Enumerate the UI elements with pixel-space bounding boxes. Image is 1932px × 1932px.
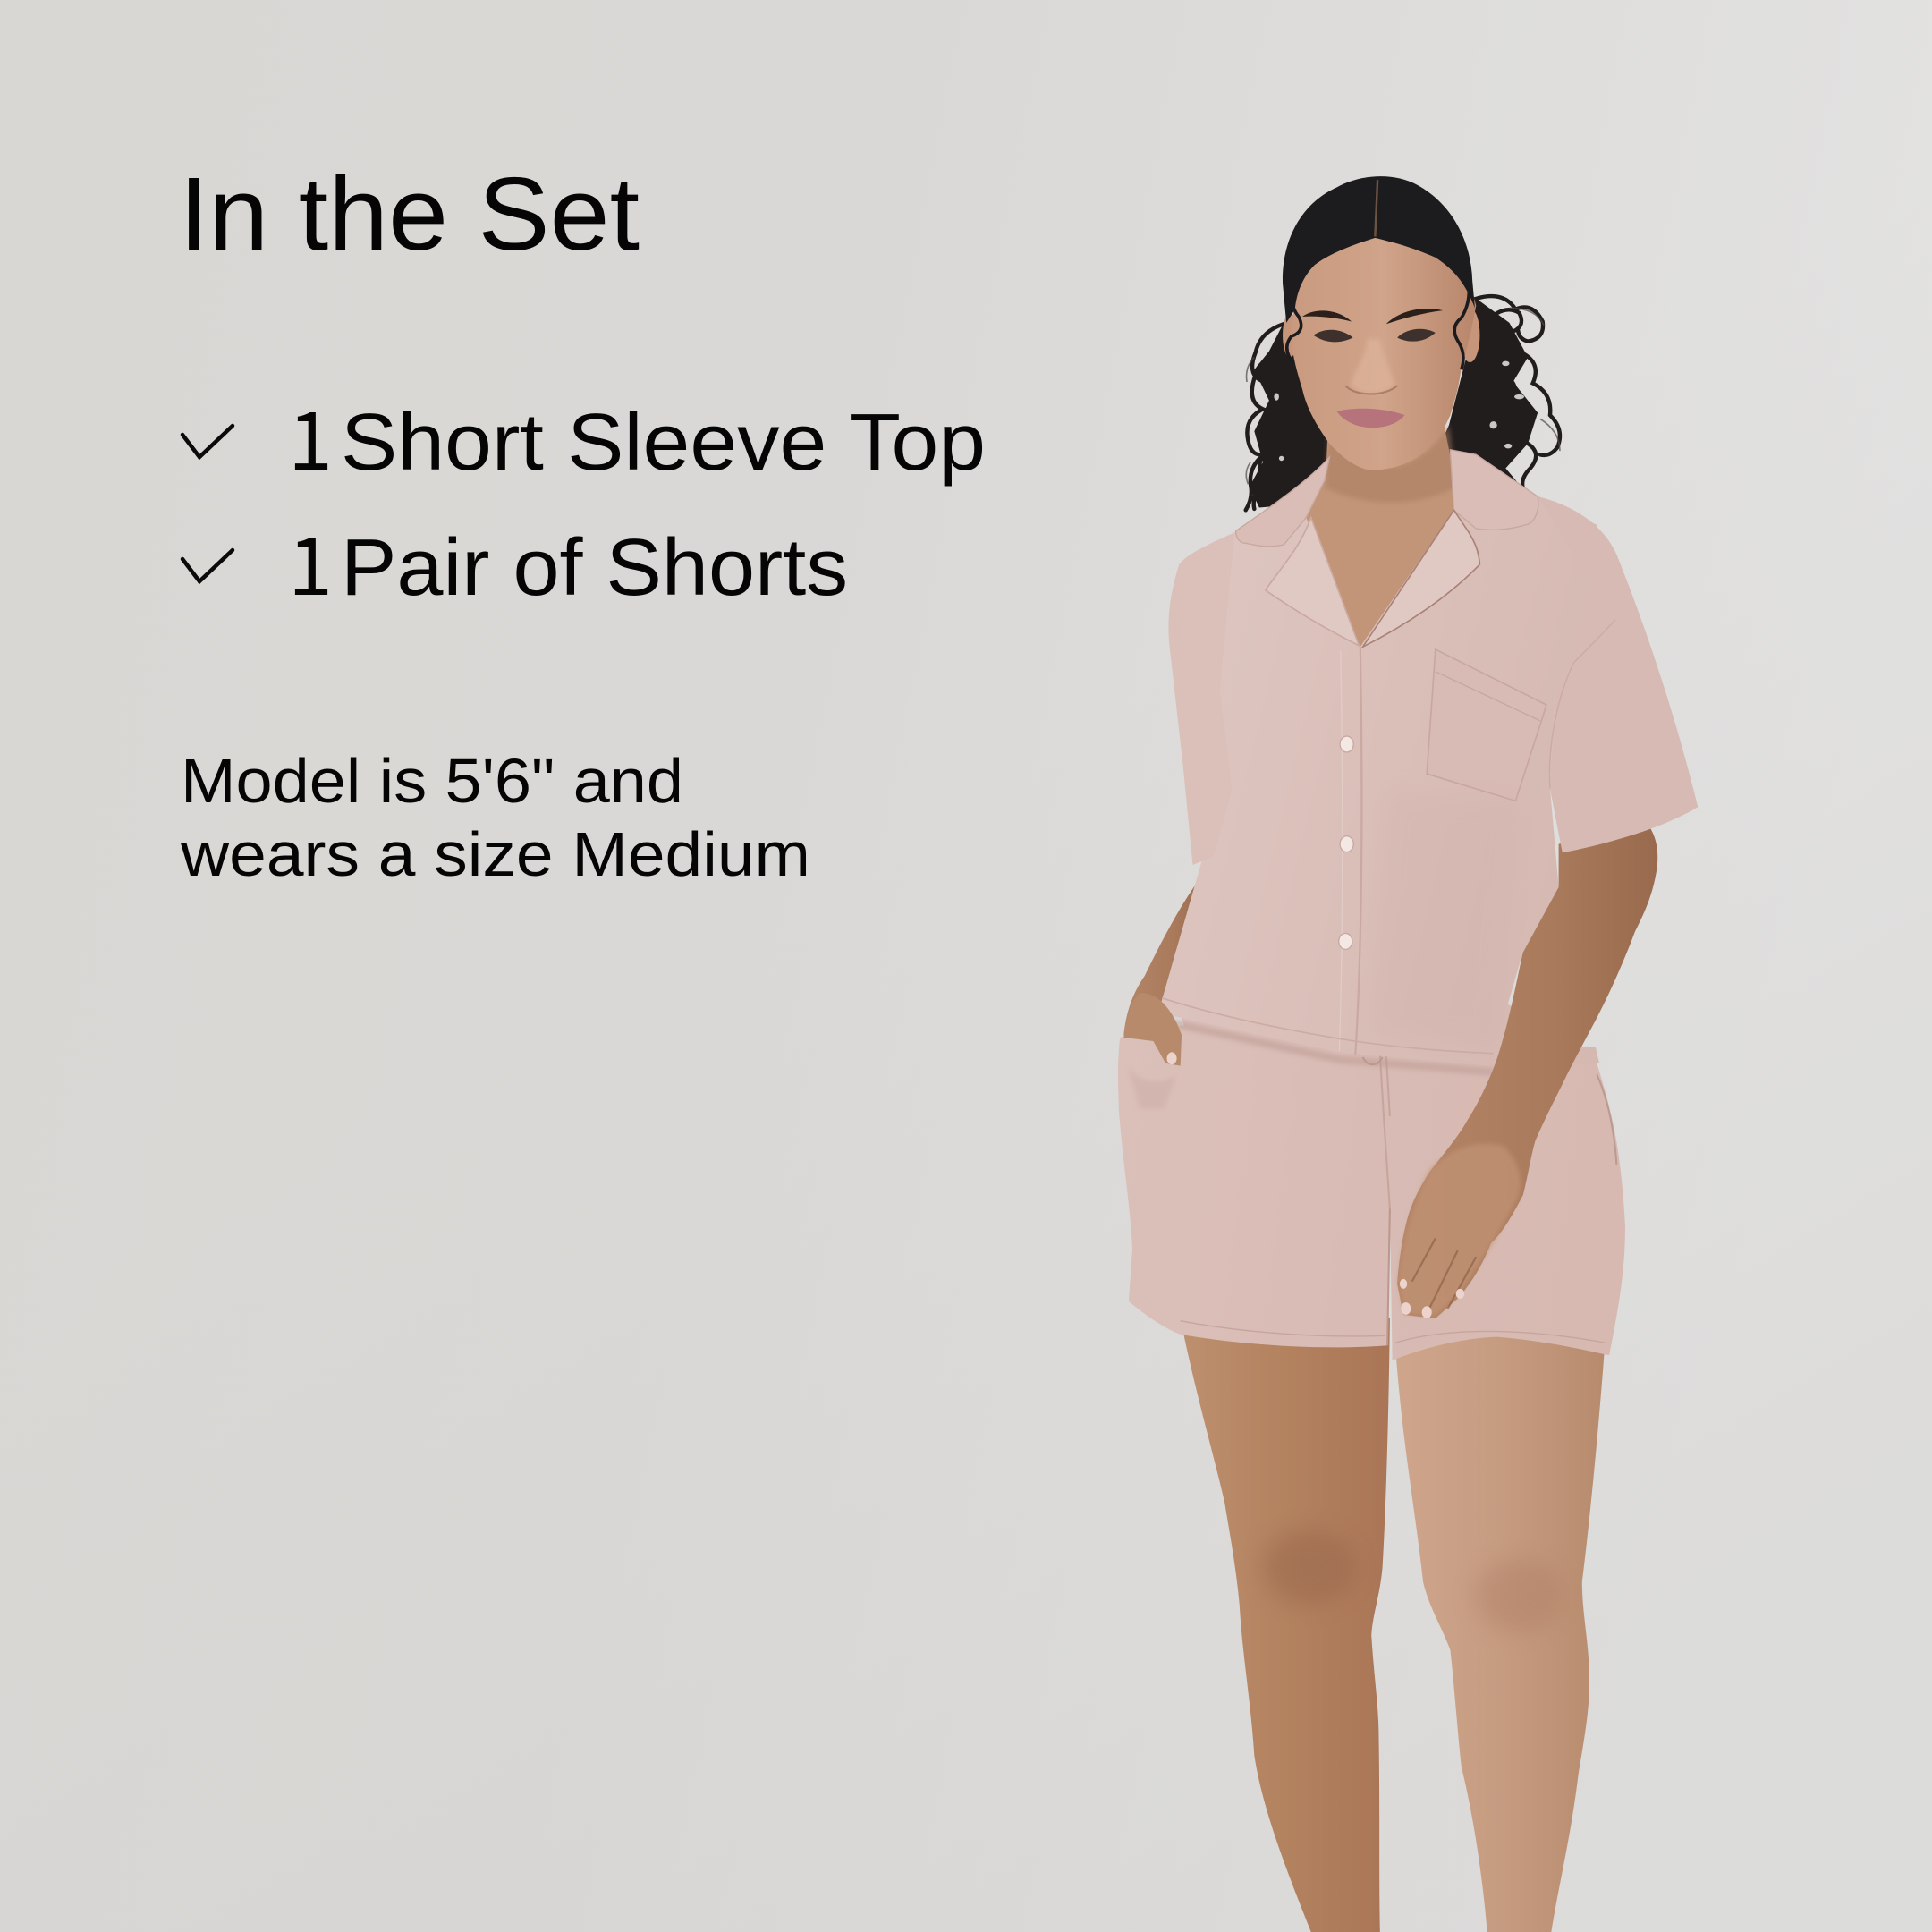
sleeve seam right xyxy=(1549,620,1615,789)
hand highlight xyxy=(1399,1144,1521,1316)
shorts xyxy=(1118,986,1625,1360)
legs xyxy=(1181,1318,1606,1932)
left lapel xyxy=(1266,518,1359,646)
shirt back piece xyxy=(1540,1047,1599,1067)
model size note xyxy=(180,746,810,889)
shirt sleeve right xyxy=(1538,496,1698,852)
title: In the Set xyxy=(179,156,640,272)
left hand xyxy=(1123,993,1182,1066)
face framing curls xyxy=(1287,271,1469,369)
checklist xyxy=(182,377,986,618)
icon: check mark two xyxy=(182,550,233,581)
model size note: Model is 5'6" and xyxy=(181,746,683,816)
hem shadow on shorts xyxy=(1171,1022,1494,1072)
right arm and hand xyxy=(1397,826,1657,1318)
right lapel xyxy=(1363,510,1479,647)
fingernails xyxy=(1400,1279,1464,1318)
eyes xyxy=(1313,329,1436,342)
left arm in pocket xyxy=(1123,860,1207,1066)
back hair curls xyxy=(1246,296,1560,510)
pocket xyxy=(1427,649,1546,801)
hair top xyxy=(1283,176,1475,323)
fold shadow xyxy=(1368,789,1521,1047)
model size note: wears a size Medium xyxy=(180,819,810,889)
icon: check mark one xyxy=(182,426,233,457)
model photo illustration xyxy=(1118,176,1698,1932)
fingernail xyxy=(1167,1052,1177,1064)
list item: shorts: Pair of Shorts xyxy=(341,523,848,613)
neck shadow xyxy=(1326,425,1456,503)
fingers xyxy=(1412,1238,1476,1309)
ears xyxy=(1283,308,1479,362)
eyebrows xyxy=(1302,309,1443,324)
nose xyxy=(1351,339,1394,394)
placket xyxy=(1355,647,1361,1055)
shirt sleeve left xyxy=(1168,532,1234,865)
list item: shorts: 1 xyxy=(288,502,333,618)
list item: top: 1 xyxy=(288,377,333,493)
hair part xyxy=(1375,180,1377,236)
buttons xyxy=(1339,736,1353,949)
neck and chest xyxy=(1306,425,1456,647)
face xyxy=(1292,234,1476,470)
right leg xyxy=(1394,1318,1606,1932)
hem xyxy=(1162,998,1494,1054)
collar left xyxy=(1236,457,1329,547)
collar right xyxy=(1450,450,1538,530)
list item: top: Short Sleeve Top xyxy=(341,398,986,487)
shirt body xyxy=(1158,496,1615,1066)
lips xyxy=(1337,409,1404,428)
left leg xyxy=(1181,1318,1390,1932)
